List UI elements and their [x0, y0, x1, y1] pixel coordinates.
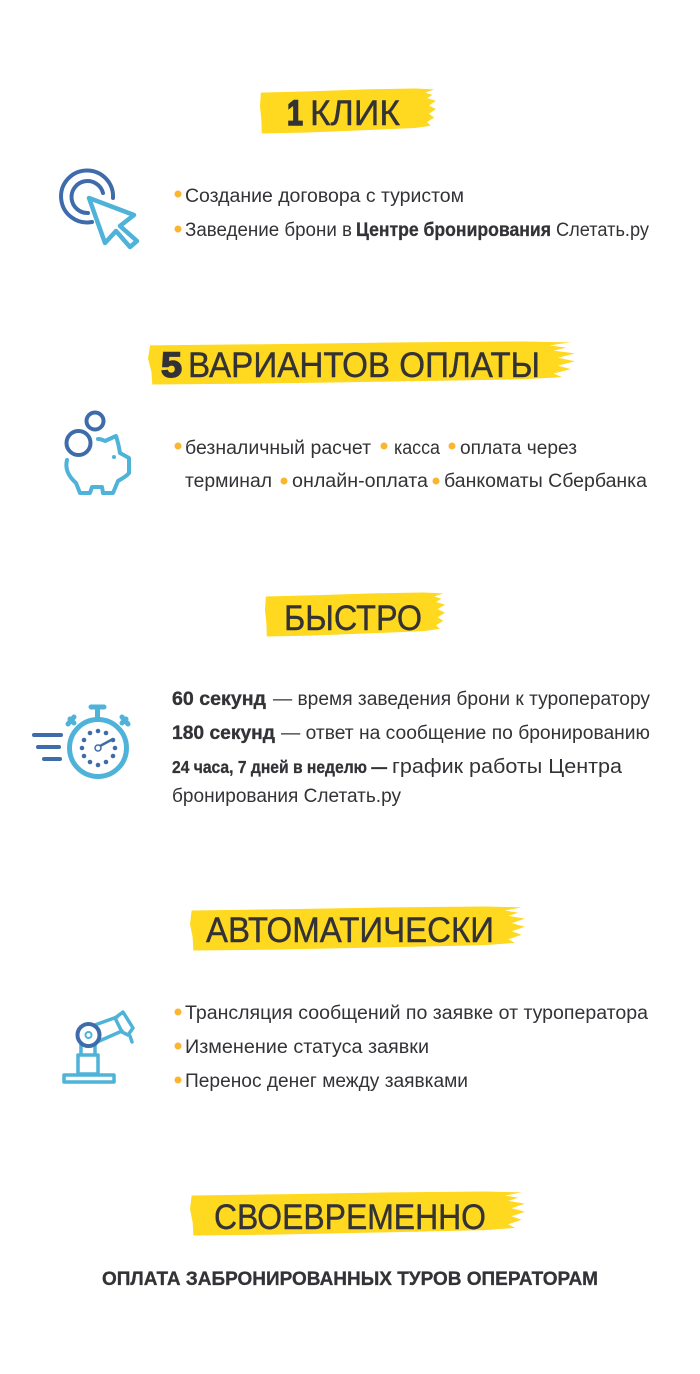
list: automatic items: Изменение статуса заявки [185, 1037, 429, 1058]
icon: robot arm [64, 1012, 133, 1082]
heading: 5 payment options: 5 [161, 346, 182, 385]
heading: 1 click: 1 [287, 94, 303, 133]
text block: speed facts: — время заведения брони к туроператору [273, 689, 650, 710]
text block: speed facts: 60 секунд [172, 689, 266, 710]
list: payment methods: оплата через [460, 438, 577, 459]
text block: speed facts [172, 689, 650, 807]
list: payment methods: банкоматы Сбербанка [444, 471, 647, 492]
list: payment methods: безналичный расчет [185, 438, 371, 459]
text block: speed facts: 24 часа, 7 дней в неделю — [172, 757, 387, 777]
list: payment methods [174, 438, 647, 492]
text block: speed facts: график работы Центра [392, 756, 623, 778]
icon: piggy bank with coins [66, 412, 129, 493]
list: automatic items [174, 1003, 648, 1092]
list: click items: Создание договора с туристом [185, 186, 464, 207]
list: click items [174, 186, 649, 241]
list: automatic items: Трансляция сообщений по заявке от туроператора [185, 1003, 648, 1024]
list: click items: Слетать.ру [556, 220, 649, 241]
section: on time [102, 1191, 598, 1290]
heading: 1 click: КЛИК [310, 94, 401, 133]
heading: 1 click [260, 88, 436, 134]
list: click items: Заведение брони в [185, 220, 352, 241]
icon: cursor on target [61, 170, 137, 247]
heading: 5 payment options: ВАРИАНТОВ ОПЛАТЫ [188, 346, 540, 385]
text: tour payment: ОПЛАТА ЗАБРОНИРОВАННЫХ ТУРОВ ОПЕРАТОРАМ [102, 1269, 598, 1290]
text block: speed facts: 180 секунд [172, 723, 275, 744]
list: payment methods: терминал [185, 471, 272, 492]
list: automatic items: Перенос денег между заявками [185, 1071, 468, 1092]
heading: on time: СВОЕВРЕМЕННО [214, 1198, 486, 1237]
section: automatic [64, 906, 648, 1092]
section: payment options [66, 341, 647, 493]
heading: automatic: АВТОМАТИЧЕСКИ [206, 911, 494, 950]
text block: speed facts: бронирования Слетать.ру [172, 786, 401, 807]
text block: speed facts: — ответ на сообщение по бронированию [281, 723, 650, 744]
icon: stopwatch [34, 707, 128, 776]
section: fast [34, 592, 650, 807]
section: 1 click [61, 88, 649, 247]
list: payment methods: онлайн-оплата [292, 471, 428, 492]
heading: fast: БЫСТРО [284, 599, 422, 638]
list: click items: Центре бронирования [356, 220, 551, 241]
list: payment methods: касса [394, 438, 440, 459]
